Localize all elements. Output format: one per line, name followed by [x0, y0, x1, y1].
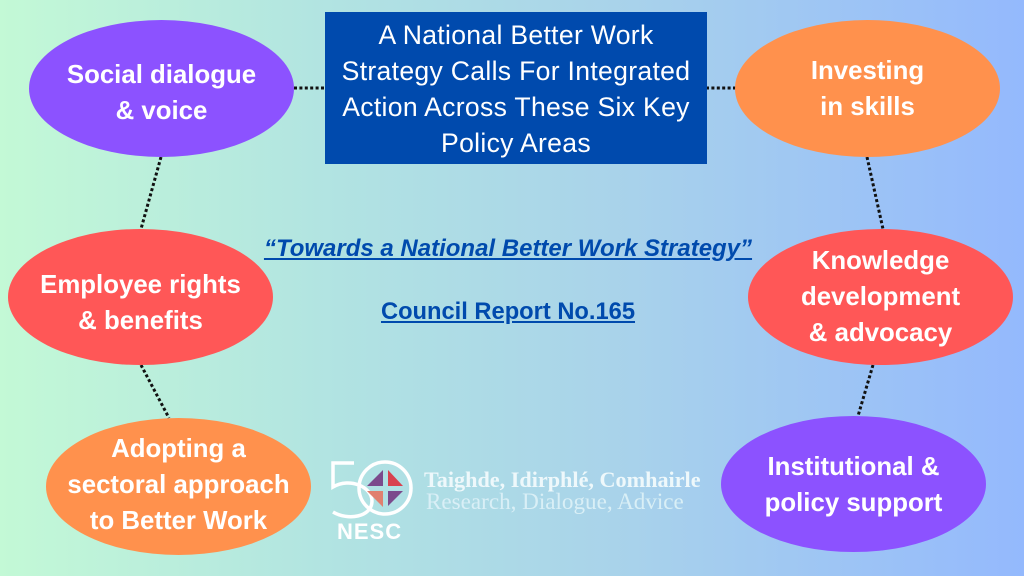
- oval: employee rights: & benefits: [78, 307, 203, 335]
- logo tagline Irish: Taighde, Idirphlé, Comhairle: [424, 467, 701, 492]
- logo tagline English: Research, Dialogue, Advice: [426, 488, 684, 514]
- oval: knowledge development: [748, 229, 1013, 365]
- logo circle: [359, 462, 411, 514]
- oval: social dialogue: & voice: [116, 97, 207, 125]
- oval: institutional support: [721, 416, 986, 552]
- oval: sectoral approach: Adopting a: [111, 435, 246, 463]
- title box: Policy Areas: [441, 128, 591, 158]
- title box: Strategy Calls For Integrated: [342, 56, 690, 86]
- oval: social dialogue: [29, 20, 294, 157]
- oval: knowledge development: development: [801, 283, 960, 311]
- report number link: Council Report No.165: [381, 299, 635, 325]
- oval: social dialogue: Social dialogue: [67, 61, 256, 89]
- oval: knowledge development: & advocacy: [809, 319, 952, 347]
- oval: sectoral approach: to Better Work: [90, 507, 267, 535]
- oval: investing in skills: [735, 20, 1000, 157]
- oval: investing in skills: in skills: [820, 93, 915, 121]
- title box: [325, 12, 707, 164]
- oval: institutional support: Institutional &: [768, 453, 939, 481]
- oval: sectoral approach: sectoral approach: [67, 471, 290, 499]
- oval: knowledge development: Knowledge: [812, 247, 949, 275]
- oval: investing in skills: Investing: [811, 57, 924, 85]
- oval: employee rights: [8, 229, 273, 365]
- oval: employee rights: Employee rights: [40, 271, 241, 299]
- logo wordmark: NESC: [337, 519, 402, 544]
- logo diamond: [388, 470, 403, 486]
- oval: sectoral approach: [46, 418, 311, 555]
- logo numeral 5: [333, 463, 372, 517]
- title box: Action Across These Six Key: [342, 92, 690, 122]
- title box: A National Better Work: [378, 20, 654, 50]
- report title link: “Towards a National Better Work Strategy”: [264, 235, 752, 262]
- oval: institutional support: policy support: [765, 489, 942, 517]
